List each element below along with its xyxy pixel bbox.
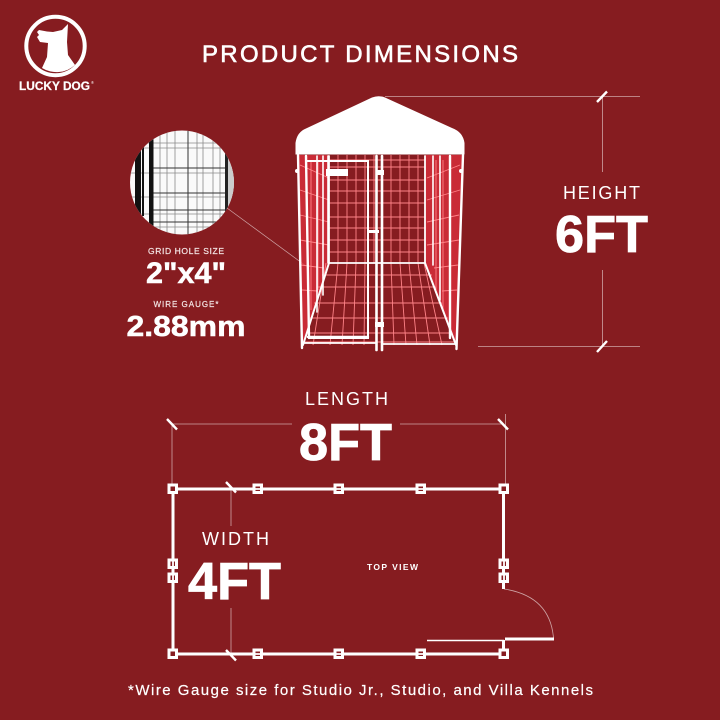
- canopy roof: [296, 96, 464, 154]
- width dimension: 4FT: [188, 553, 281, 611]
- height dimension: 6FT: [555, 206, 648, 264]
- logo: Lucky Dog: LUCKY DOG: [19, 81, 90, 93]
- frame: [298, 155, 463, 350]
- door latch and hinges: [295, 169, 463, 327]
- label: wire gauge: WIRE GAUGE*: [154, 300, 218, 309]
- kennel illustration: front view: [295, 96, 464, 350]
- title: PRODUCT DIMENSIONS: [202, 41, 518, 68]
- mesh: back and side panels: [298, 155, 463, 345]
- length dimension: LENGTH: [305, 389, 388, 409]
- footnote: *Wire Gauge size for Studio Jr., Studio, and Villa Kennels: [128, 682, 593, 699]
- top view label: TOP VIEW: [367, 562, 419, 572]
- label: wire gauge: 2.88mm: [126, 311, 246, 343]
- label: grid hole size: GRID HOLE SIZE: [148, 246, 224, 256]
- label: wire gauge: [126, 300, 246, 343]
- length dimension: 8FT: [299, 414, 392, 472]
- length dimension: [167, 389, 508, 484]
- logo: Lucky Dog: [19, 17, 94, 93]
- inset: wire grid close-up: [130, 130, 236, 235]
- width dimension: WIDTH: [202, 529, 269, 549]
- door swing arc: [504, 589, 554, 638]
- leader line from inset to kennel: [227, 208, 306, 266]
- height dimension: [385, 92, 648, 352]
- frame connectors: [169, 485, 508, 658]
- label: grid hole size: 2"x4": [146, 257, 226, 290]
- height dimension: HEIGHT: [563, 183, 640, 203]
- kennel outline: [173, 489, 554, 654]
- logo: Lucky Dog: ®: [91, 80, 94, 85]
- width dimension: [188, 482, 281, 660]
- top view floor plan: [169, 485, 554, 658]
